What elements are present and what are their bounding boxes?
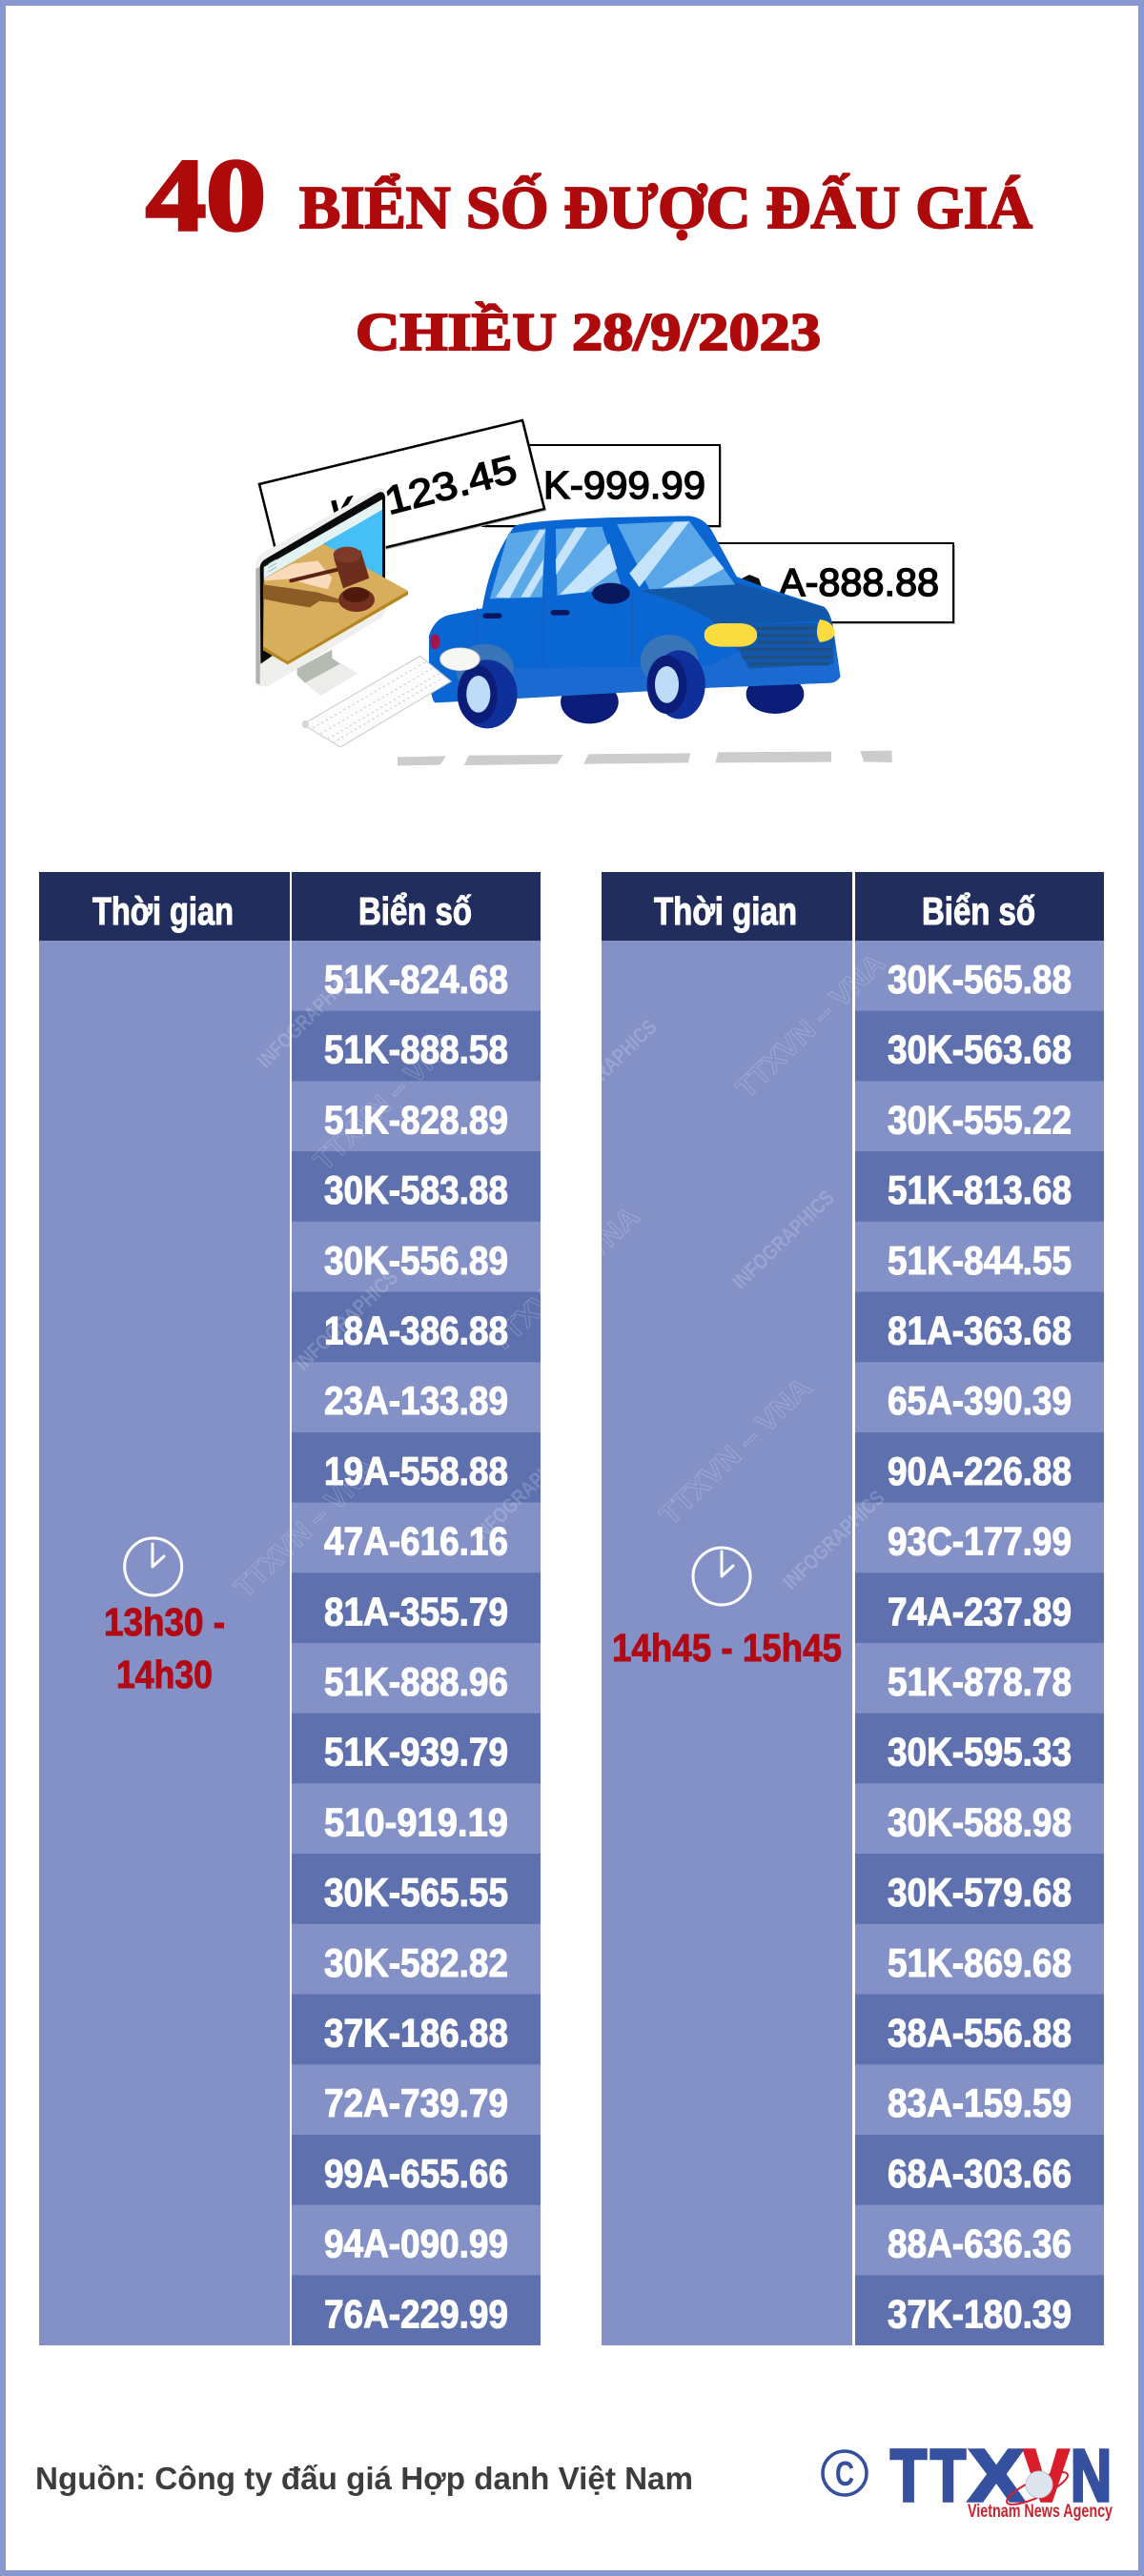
icon: clock <box>125 1538 182 1595</box>
left plate list <box>292 941 541 2345</box>
title: 40 <box>146 139 266 253</box>
watermarks: TTXVN – VNA <box>730 947 891 1105</box>
watermarks: INFOGRAPHICS <box>253 964 361 1073</box>
right plate list: 37K-180.39 <box>888 2291 1072 2336</box>
left plate list: 510-919.19 <box>324 1799 508 1844</box>
icon: keyboard and mouse <box>302 648 480 747</box>
watermarks: TTXVN – VNA <box>483 1201 645 1359</box>
time label: 13h30 - <box>104 1600 225 1644</box>
right plate list: 90A-226.88 <box>888 1449 1072 1493</box>
icon: copyright <box>823 2451 867 2495</box>
right plate list: 30K-595.33 <box>888 1730 1072 1775</box>
logo: TTXVN <box>890 2435 1113 2522</box>
watermarks: TTXVN – VNA <box>229 1452 384 1604</box>
left plate list: 30K-565.55 <box>324 1870 508 1915</box>
icon: clock <box>693 1548 750 1605</box>
logo: TTXVN: X <box>969 2435 1024 2517</box>
right plate list: 30K-563.68 <box>888 1027 1072 1072</box>
right plate list: 51K-813.68 <box>888 1167 1072 1212</box>
right plate list: 30K-588.98 <box>888 1799 1072 1844</box>
plate: A-888.88 <box>718 543 955 624</box>
watermarks: INFOGRAPHICS <box>467 1439 579 1548</box>
left plate list: 72A-739.79 <box>324 2080 508 2125</box>
panel: right table <box>602 872 1104 2345</box>
left plate list: 19A-558.88 <box>324 1449 508 1493</box>
left table header: Biển số <box>358 889 472 933</box>
panel: left table <box>39 872 541 2345</box>
right plate list: 30K-565.88 <box>888 957 1072 1002</box>
left table header <box>39 872 541 941</box>
time label: 14h45 - 15h45 <box>612 1626 842 1670</box>
right plate list: 81A-363.68 <box>888 1308 1072 1353</box>
plate: K-123.45: 123.45 <box>380 447 521 523</box>
right plate list: 51K-844.55 <box>888 1238 1072 1283</box>
right plate list: 65A-390.39 <box>888 1378 1072 1423</box>
left plate list: 51K-824.68 <box>324 957 508 1002</box>
left plate list: 51K-939.79 <box>324 1730 508 1775</box>
title <box>146 139 1032 253</box>
logo: TTXVN: T <box>930 2435 966 2517</box>
right plate list: 68A-303.66 <box>888 2151 1072 2196</box>
watermarks <box>229 947 891 1604</box>
icon: copyright: C <box>835 2454 854 2493</box>
plate: K-123.45 <box>259 420 546 575</box>
left plate list: 47A-616.16 <box>324 1519 508 1564</box>
right plate list: 74A-237.89 <box>888 1589 1072 1633</box>
plate: K-999.99 <box>482 445 722 528</box>
right table header <box>602 872 1104 941</box>
subtitle: CHIỀU 28/9/2023 <box>356 301 821 362</box>
time label <box>104 1600 225 1696</box>
watermarks: INFOGRAPHICS <box>290 1265 402 1375</box>
logo: TTXVN: N <box>1071 2435 1112 2517</box>
road dashes <box>398 751 892 765</box>
watermarks: INFOGRAPHICS <box>550 1015 662 1124</box>
watermarks: INFOGRAPHICS <box>778 1486 889 1594</box>
logo: TTXVN: V <box>1024 2435 1069 2517</box>
watermarks: TTXVN – VNA <box>308 1025 463 1177</box>
right time cell <box>602 941 852 2345</box>
left plate list: 51K-888.96 <box>324 1659 508 1704</box>
plate: A-888.88: A-888.88 <box>779 560 939 604</box>
icon: monitor with gavel <box>255 488 408 696</box>
right plate list: 51K-869.68 <box>888 1940 1072 1985</box>
left table header: Thời gian <box>92 889 234 933</box>
icon: blue car <box>429 516 840 728</box>
right plate list: 51K-878.78 <box>888 1659 1072 1704</box>
left plate list: 18A-386.88 <box>324 1308 508 1353</box>
left plate list: 30K-583.88 <box>324 1167 508 1212</box>
illustration: car, plates and online auction <box>255 420 955 765</box>
left plate list: 30K-582.82 <box>324 1940 508 1985</box>
watermarks: TTXVN – VNA <box>654 1372 818 1531</box>
right plate list: 38A-556.88 <box>888 2011 1072 2055</box>
time label: 14h30 <box>116 1653 213 1696</box>
plate: K-123.45: K- <box>327 484 376 537</box>
right table header: Thời gian <box>654 889 797 933</box>
left plate list: 99A-655.66 <box>324 2151 508 2196</box>
left plate list: 94A-090.99 <box>324 2221 508 2266</box>
logo: TTXVN: T <box>890 2435 927 2517</box>
right plate list: 83A-159.59 <box>888 2080 1072 2125</box>
source note: Nguồn: Công ty đấu giá Hợp danh Việt Nam <box>35 2461 693 2496</box>
left time cell <box>39 941 290 2345</box>
watermarks: INFOGRAPHICS <box>727 1186 839 1294</box>
left plate list: 37K-186.88 <box>324 2011 508 2055</box>
left plate list: 30K-556.89 <box>324 1238 508 1283</box>
left plate list: 51K-828.89 <box>324 1097 508 1142</box>
left plate list: 51K-888.58 <box>324 1027 508 1072</box>
left plate list: 81A-355.79 <box>324 1589 508 1633</box>
right plate list: 30K-555.22 <box>888 1097 1072 1142</box>
right plate list: 30K-579.68 <box>888 1870 1072 1915</box>
right plate list: 93C-177.99 <box>888 1519 1072 1564</box>
title: BIỂN SỐ ĐƯỢC ĐẤU GIÁ <box>299 173 1032 241</box>
right plate list: 88A-636.36 <box>888 2221 1072 2266</box>
right table header: Biển số <box>922 889 1035 933</box>
left plate list: 76A-229.99 <box>324 2291 508 2336</box>
left plate list: 23A-133.89 <box>324 1378 508 1423</box>
right plate list <box>855 941 1104 2345</box>
plate: K-999.99: K-999.99 <box>543 463 705 507</box>
